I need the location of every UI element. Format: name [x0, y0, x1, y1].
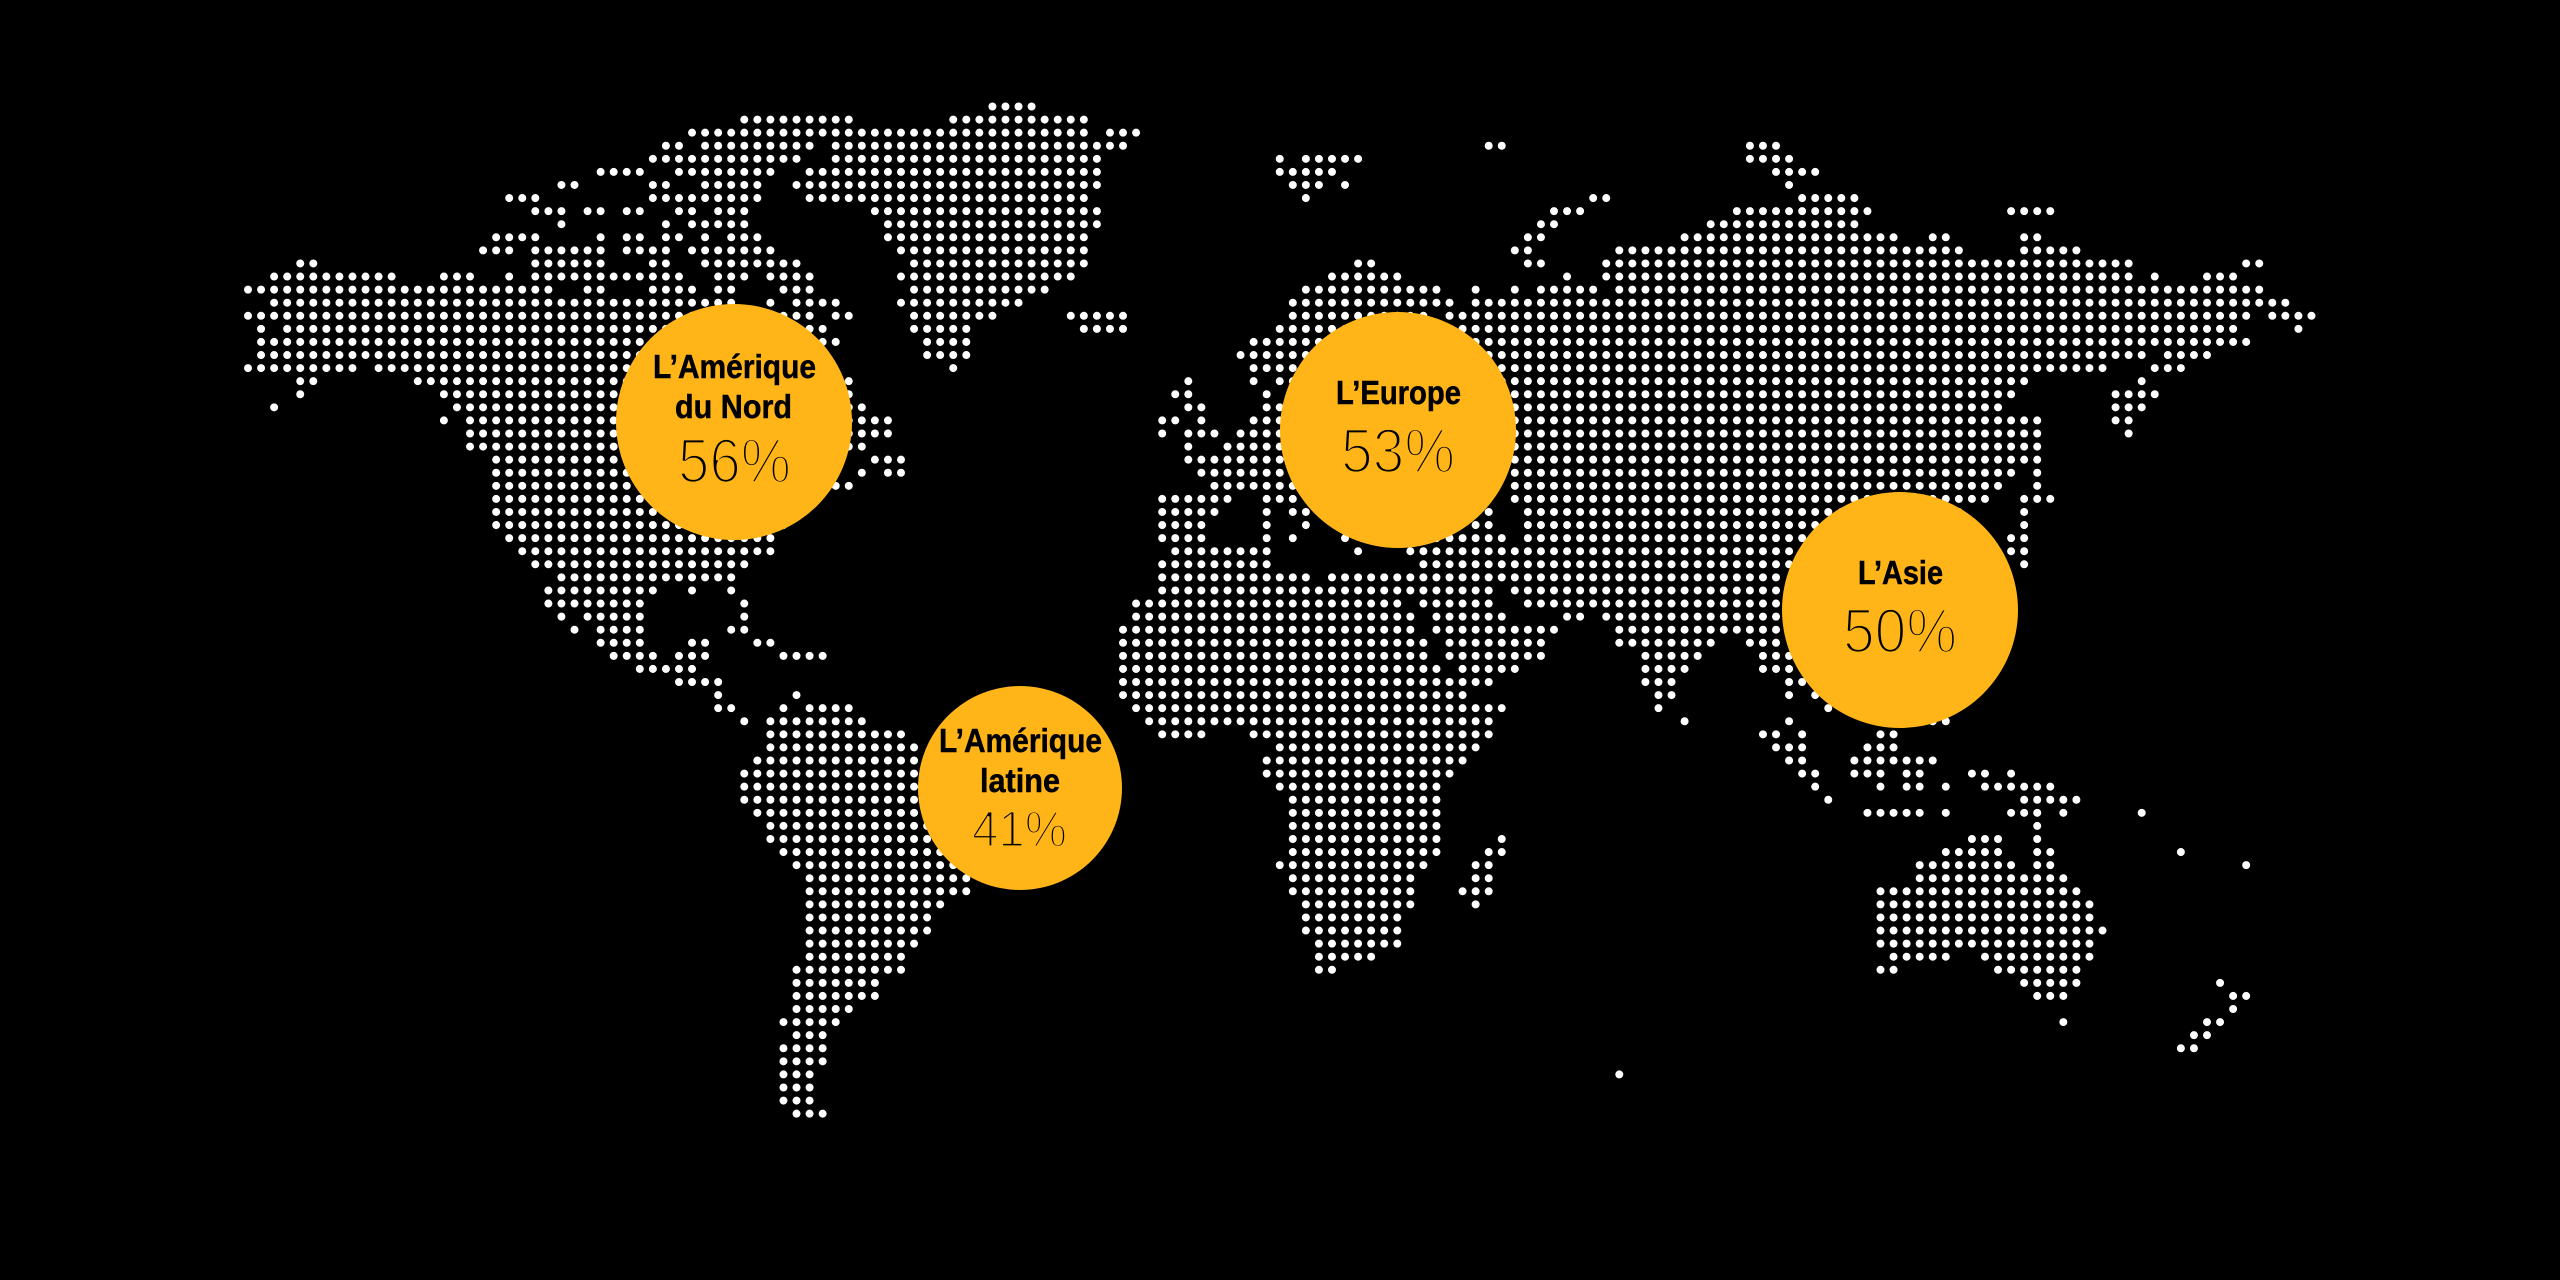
value: 56%: 56% [678, 426, 791, 496]
value: 41%: 41% [972, 800, 1067, 858]
dotted world map [248, 106, 2312, 1114]
value: 53%: 53% [1341, 416, 1455, 486]
label: North America: L’Amérique [653, 348, 816, 385]
label: Asia: L’Asie [1858, 554, 1943, 591]
label: du Nord: du Nord [675, 388, 792, 425]
label: latine: latine [980, 762, 1060, 799]
callout: Latin America [918, 686, 1122, 890]
value: 50%: 50% [1843, 596, 1957, 666]
label: Latin America: L’Amérique [939, 722, 1102, 759]
callout: Europe [1280, 312, 1516, 548]
callout: North America [616, 304, 852, 540]
callout: Asia [1782, 492, 2018, 728]
label: Europe: L’Europe [1336, 374, 1461, 411]
